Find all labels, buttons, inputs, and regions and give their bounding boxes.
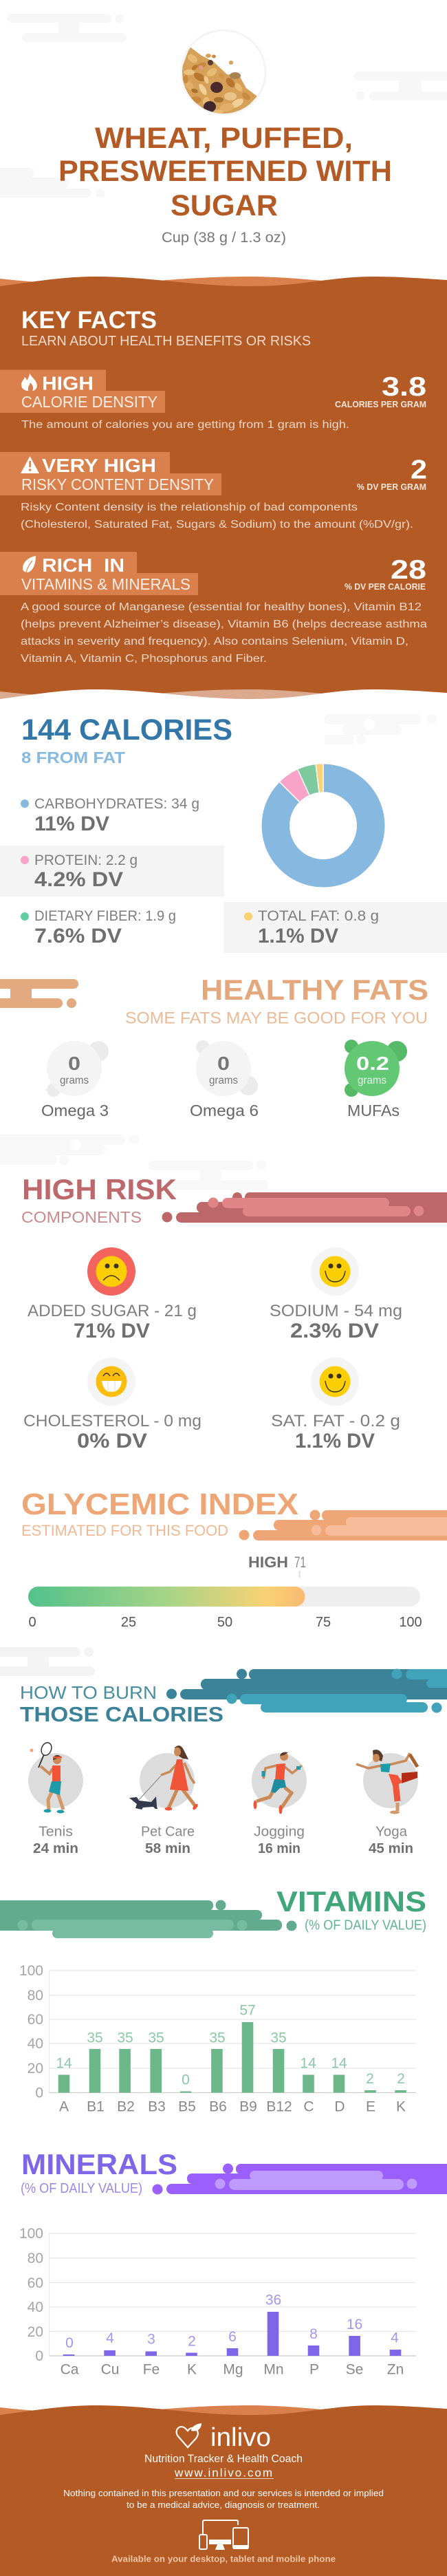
bar chart: vitamins: B1 — [87, 2099, 105, 2115]
availability note: Available on your desktop, tablet and mobile phone — [111, 2554, 336, 2564]
bar chart: vitamins: B6 — [209, 2099, 227, 2115]
macro: dietary fiber: DIETARY FIBER: 1.9 g — [34, 908, 176, 924]
heading: glycemic index: GLYCEMIC INDEX — [21, 1488, 298, 1521]
fact: very high risky content density: 2 — [411, 455, 427, 484]
fact: rich in vitamins and minerals: RICH IN — [42, 555, 124, 576]
macro: dietary fiber — [21, 908, 176, 947]
bar chart: minerals: 3 — [147, 2331, 155, 2348]
glycemic scale labels: 100 — [399, 1615, 422, 1630]
bar chart: vitamins: E — [366, 2099, 375, 2115]
bar chart: minerals: P — [309, 2361, 319, 2378]
fact: rich in vitamins and minerals: % DV PER CALORIE — [345, 582, 426, 592]
bar chart: vitamins: 2 — [397, 2071, 405, 2087]
activity: tennis: Tenis — [39, 1825, 73, 1840]
fact: high calorie density: 3.8 — [382, 372, 426, 402]
bar chart: vitamins: B9 — [239, 2099, 257, 2115]
activity: jogging — [252, 1752, 307, 1856]
fact: very high risky content density: VERY HIGH — [42, 455, 156, 476]
logo: inlivo — [177, 2423, 271, 2452]
macro: carbohydrates: 11% DV — [34, 813, 109, 835]
risk: saturated fat: 1.1% DV — [295, 1430, 375, 1452]
donut chart — [276, 764, 371, 873]
bar chart: vitamins: D — [334, 2099, 345, 2115]
bar chart: minerals: 4 — [106, 2330, 114, 2346]
food photo: granola in circle — [179, 30, 265, 117]
heading: vitamins: VITAMINS — [276, 1885, 426, 1918]
risk: added sugar: 71% DV — [74, 1320, 150, 1342]
bar chart: vitamins: 57 — [239, 2002, 256, 2019]
macro: carbohydrates — [21, 796, 199, 835]
bar chart: vitamins: 100 — [19, 1963, 43, 1979]
fat: MUFAs: 0.2 — [356, 1053, 389, 1074]
risk: saturated fat — [271, 1357, 400, 1452]
subheading: glycemic index: ESTIMATED FOR THIS FOOD — [21, 1522, 228, 1539]
macro: total fat — [224, 902, 447, 953]
glycemic index value: HIGH — [248, 1554, 288, 1571]
decoration: burn calories bars — [166, 1669, 447, 1713]
bar chart: vitamins: 35 — [148, 2030, 164, 2046]
fact: very high risky content density: (Cholesterol, Saturated Fat, Sugars & Sodium) to the amount (%DV/gr). — [21, 519, 413, 530]
bar chart: minerals: Cu — [101, 2361, 119, 2378]
bar chart: minerals: Fe — [143, 2361, 160, 2378]
fact: very high risky content density: RISKY CONTENT DENSITY — [21, 475, 214, 493]
bar chart: minerals: 6 — [228, 2329, 237, 2345]
fat: MUFAs: MUFAs — [347, 1102, 400, 1119]
bar chart: vitamins: 40 — [28, 2036, 43, 2052]
bar chart: minerals: 4 — [391, 2330, 399, 2346]
fact: rich in vitamins and minerals: (helps prevent Alzheimer’s disease), Vitamin B6 (helps decrease asthma — [21, 619, 427, 630]
glycemic index bar — [28, 1587, 420, 1607]
bar chart: vitamins: 2 — [366, 2071, 374, 2087]
bar chart: minerals: 2 — [188, 2334, 196, 2349]
activity: pet care — [129, 1746, 199, 1856]
disclaimer: Nothing contained in this presentation and our services is intended or implied — [63, 2488, 384, 2498]
bar chart: vitamins: 14 — [56, 2056, 72, 2071]
fact: rich in vitamins and minerals: VITAMINS & MINERALS — [21, 575, 190, 593]
fat: MUFAs: grams — [358, 1075, 386, 1086]
decoration: glycemic index bars — [239, 1510, 447, 1541]
bar chart: vitamins — [19, 1963, 416, 2115]
fact: rich in vitamins and minerals: 28 — [391, 555, 426, 585]
subheading: from fat: 8 FROM FAT — [21, 749, 126, 766]
bar chart: vitamins: C — [303, 2099, 314, 2115]
panel: key facts — [0, 277, 447, 716]
macro: protein: PROTEIN: 2.2 g — [34, 852, 138, 868]
fact: high calorie density: The amount of calories you are getting from 1 gram is high. — [21, 419, 349, 431]
fact: rich in vitamins and minerals — [0, 552, 427, 665]
subheading: minerals: (% OF DAILY VALUE) — [21, 2181, 142, 2196]
activity: yoga: 45 min — [369, 1841, 413, 1856]
fat: omega 6 — [190, 1040, 259, 1119]
bar chart: minerals: 0 — [35, 2348, 43, 2364]
decoration: high risk bars — [162, 1192, 447, 1223]
glycemic scale labels: 25 — [121, 1615, 136, 1630]
fact: high calorie density — [0, 370, 426, 431]
bar chart: vitamins: 0 — [182, 2072, 190, 2087]
serving size: Cup (38 g / 1.3 oz) — [162, 230, 286, 246]
bar chart: minerals: Zn — [387, 2361, 404, 2378]
macro: dietary fiber: 7.6% DV — [34, 925, 122, 947]
activity: tennis: 24 min — [33, 1841, 78, 1856]
decoration: vitamins bars — [0, 1900, 297, 1938]
bar chart: vitamins: 80 — [28, 1988, 43, 2004]
icon: leaf — [23, 556, 36, 572]
bar chart: minerals: 20 — [28, 2324, 43, 2340]
macro: carbohydrates: CARBOHYDRATES: 34 g — [34, 796, 199, 812]
bar chart: minerals: K — [187, 2361, 197, 2378]
subheading: vitamins: (% OF DAILY VALUE) — [305, 1918, 426, 1933]
bar chart: vitamins: 35 — [117, 2030, 133, 2046]
heading: how to burn: HOW TO BURN — [20, 1682, 157, 1703]
glycemic index value: 71 — [294, 1554, 306, 1571]
bar chart: minerals: Mn — [263, 2361, 284, 2378]
background clouds: high risk — [0, 1135, 268, 1190]
macro: total fat: TOTAL FAT: 0.8 g — [258, 908, 379, 924]
glycemic index value — [248, 1554, 306, 1578]
icon: warning triangle — [21, 456, 39, 473]
title: WHEAT, PUFFED, — [95, 122, 353, 155]
activity: tennis — [28, 1741, 83, 1856]
bar chart: vitamins: 14 — [331, 2056, 347, 2071]
bar chart: vitamins: 35 — [270, 2030, 287, 2046]
fat: omega 6: Omega 6 — [190, 1102, 259, 1119]
fact: very high risky content density — [0, 452, 427, 530]
bar chart: vitamins: B2 — [117, 2099, 135, 2115]
risk: saturated fat: SAT. FAT - 0.2 g — [271, 1412, 400, 1430]
activity: yoga: Yoga — [375, 1825, 408, 1840]
fact: very high risky content density: % DV PER GRAM — [357, 482, 426, 492]
background clouds: header — [0, 14, 447, 198]
title: PRESWEETENED WITH — [58, 155, 392, 188]
risk: added sugar — [28, 1247, 197, 1342]
bar chart: minerals: 0 — [65, 2335, 74, 2351]
icon: devices — [199, 2520, 248, 2550]
risk: cholesterol: CHOLESTEROL - 0 mg — [23, 1412, 201, 1430]
logo: inlivo: inlivo — [210, 2423, 271, 2452]
bar chart: vitamins: 60 — [28, 2012, 43, 2028]
heading: minerals: MINERALS — [21, 2148, 177, 2180]
website link: www.inlivo.com — [174, 2466, 272, 2480]
bar chart: vitamins: B5 — [178, 2099, 196, 2115]
risk: added sugar: ADDED SUGAR - 21 g — [28, 1302, 197, 1320]
macro: protein: 4.2% DV — [34, 868, 123, 891]
fat: omega 3 — [41, 1041, 109, 1119]
icon: flame — [21, 373, 37, 391]
fat: MUFAs — [345, 1040, 407, 1119]
activity: yoga — [356, 1750, 418, 1856]
fat: omega 6: grams — [209, 1075, 238, 1086]
bar chart: vitamins: K — [396, 2099, 406, 2115]
bar chart: minerals: 80 — [28, 2251, 43, 2266]
fact: high calorie density: CALORIE DENSITY — [21, 393, 157, 411]
fact: rich in vitamins and minerals: Vitamin A, Vitamin C, Phosphorus and Fiber. — [21, 653, 267, 665]
subheading: key facts: LEARN ABOUT HEALTH BENEFITS OR RISKS — [21, 334, 311, 349]
glycemic scale labels: 50 — [217, 1615, 232, 1630]
bar chart: minerals — [19, 2226, 416, 2378]
bar chart: minerals: Ca — [61, 2361, 79, 2378]
bar chart: vitamins: B12 — [266, 2099, 292, 2115]
bar chart: minerals: Mg — [223, 2361, 243, 2378]
risk: sodium — [270, 1247, 402, 1342]
fact: high calorie density: CALORIES PER GRAM — [335, 400, 426, 409]
activity: jogging: 16 min — [258, 1841, 301, 1856]
bar chart: vitamins: 35 — [209, 2030, 226, 2046]
title — [58, 122, 392, 222]
bar chart: minerals: 60 — [28, 2275, 43, 2291]
activity: jogging: Jogging — [254, 1825, 305, 1840]
fact: rich in vitamins and minerals: A good source of Manganese (essential for healthy bones), Vitamin B12 — [21, 601, 422, 613]
heading: calories: 144 CALORIES — [21, 713, 232, 747]
fat: omega 3: grams — [60, 1075, 89, 1086]
decoration: healthy fats bars — [0, 979, 78, 1008]
bar chart: minerals: 36 — [265, 2293, 281, 2308]
bar chart: minerals: 16 — [347, 2317, 362, 2332]
fat: omega 3: Omega 3 — [41, 1102, 109, 1119]
glycemic scale labels: 75 — [316, 1615, 331, 1630]
decoration: minerals bars — [153, 2163, 447, 2195]
fact: very high risky content density: Risky Content density is the relationship of bad components — [21, 502, 358, 513]
macro: total fat: 1.1% DV — [258, 925, 338, 947]
subheading: components: COMPONENTS — [21, 1208, 142, 1226]
risk: cholesterol: 0% DV — [77, 1430, 147, 1452]
bar chart: vitamins: A — [59, 2099, 69, 2115]
heading: healthy fats: HEALTHY FATS — [201, 974, 428, 1006]
bar chart: vitamins: 35 — [87, 2030, 103, 2046]
disclaimer — [63, 2488, 384, 2510]
activity: pet care: 58 min — [145, 1841, 190, 1856]
fat: omega 3: 0 — [68, 1053, 80, 1074]
tagline: Nutrition Tracker & Health Coach — [144, 2454, 303, 2465]
risk: sodium: 2.3% DV — [290, 1320, 379, 1342]
subheading: healthy fats: SOME FATS MAY BE GOOD FOR YOU — [125, 1009, 428, 1028]
heading: key facts: KEY FACTS — [21, 307, 157, 334]
background cloud: burn calories — [0, 1647, 95, 1676]
title: SUGAR — [171, 189, 278, 222]
bar chart: vitamins: B3 — [148, 2099, 166, 2115]
bar chart: vitamins: 0 — [35, 2085, 43, 2101]
macro: protein — [0, 846, 224, 897]
glycemic scale labels — [28, 1615, 422, 1630]
activity: pet care: Pet Care — [141, 1825, 195, 1840]
fact: high calorie density: HIGH — [42, 373, 94, 394]
panel: footer — [0, 2405, 447, 2576]
fat: omega 6: 0 — [217, 1053, 230, 1074]
fact: rich in vitamins and minerals: attacks in severity and frequency). Also contains Selenium, Vitamin D, — [21, 636, 408, 647]
bar chart: vitamins: 14 — [300, 2056, 316, 2071]
bar chart: minerals: Se — [346, 2361, 363, 2378]
bar chart: minerals: 100 — [19, 2226, 43, 2242]
bar chart: minerals: 8 — [309, 2326, 318, 2342]
heading: those calories: THOSE CALORIES — [20, 1702, 224, 1726]
disclaimer: to be a medical advice, diagnosis or treatment. — [127, 2500, 320, 2510]
risk: cholesterol — [23, 1357, 201, 1452]
risk: sodium: SODIUM - 54 mg — [270, 1302, 402, 1320]
bar chart: vitamins: 20 — [28, 2061, 43, 2076]
background cloud: calories — [325, 714, 437, 744]
bar chart: minerals: 40 — [28, 2299, 43, 2315]
heading: high risk: HIGH RISK — [22, 1173, 177, 1205]
glycemic scale labels: 0 — [28, 1615, 36, 1630]
